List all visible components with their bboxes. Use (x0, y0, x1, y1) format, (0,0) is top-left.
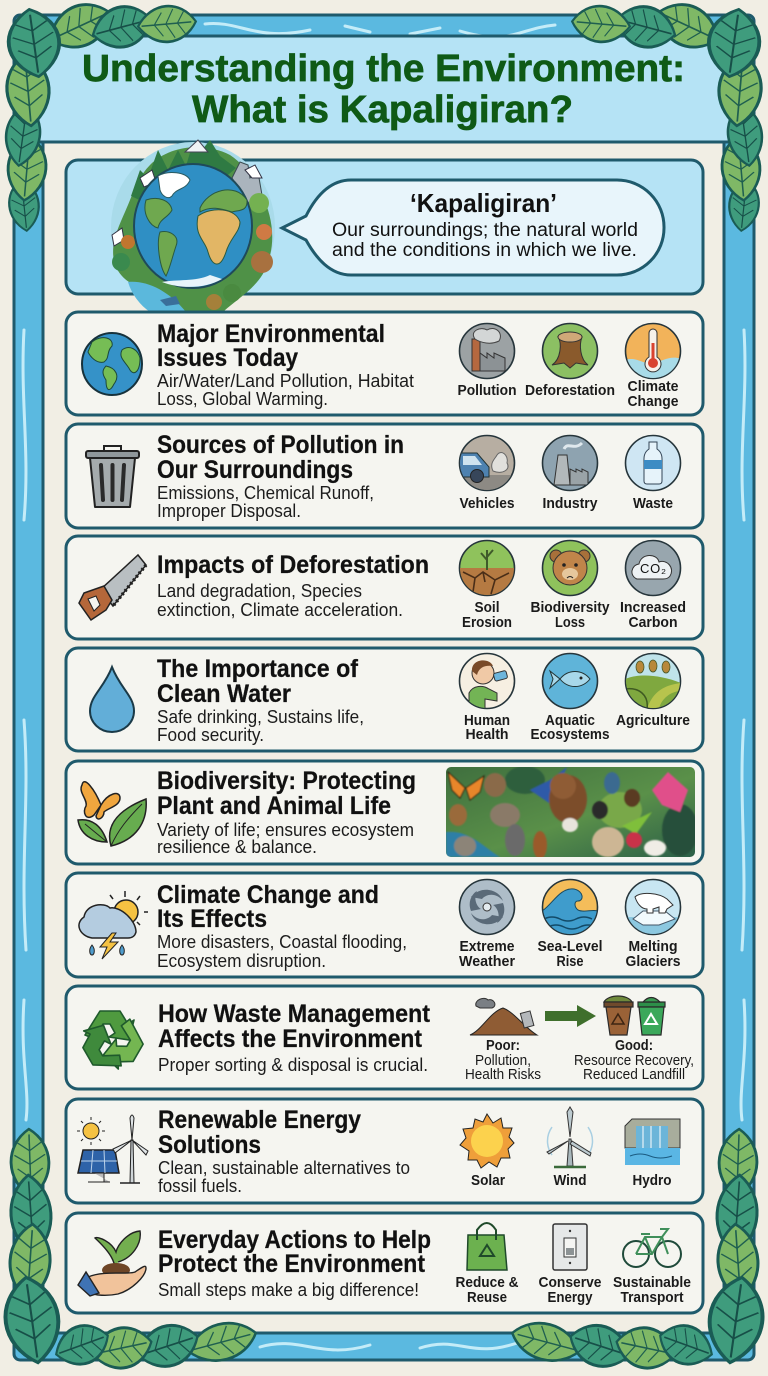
label: Biodiversity Loss: Biodiversity (530, 599, 610, 616)
description: Safe drinking, Sustains life, (157, 707, 364, 727)
icon: soil erosion (459, 540, 515, 596)
description: Air/Water/Land Pollution, Habitat (157, 371, 414, 391)
icon: hand saw (79, 555, 146, 620)
description: Clean, sustainable alternatives to (158, 1158, 410, 1178)
heading line 2: Clean Water (157, 680, 291, 708)
icon: light switch (553, 1224, 587, 1270)
leaf border: top right (571, 0, 766, 232)
label line 2: Loss (555, 614, 585, 631)
description line 2: Loss, Global Warming. (157, 389, 328, 409)
icon: recycling arrows (76, 1011, 151, 1078)
icon: hand holding seedling (78, 1231, 146, 1296)
icon: hydro dam (625, 1119, 680, 1165)
icon: vehicles (459, 436, 515, 491)
label: resource recovery: Resource Recovery, (574, 1053, 694, 1069)
heading: Climate Change and (157, 881, 379, 909)
icon: waste bottle (626, 436, 680, 490)
label line 2: Health (466, 726, 508, 743)
panel: clean water (66, 648, 703, 751)
panel: renewable energy (66, 1099, 703, 1203)
heading line 2: Its Effects (157, 905, 267, 933)
label: Wind: Wind (554, 1172, 586, 1189)
heading line 2: Issues Today (157, 344, 298, 372)
description line 2: Ecosystem disruption. (157, 951, 326, 971)
heading: Everyday Actions to Help (158, 1226, 431, 1254)
icon: increased carbon: CO₂ (640, 561, 666, 576)
panel: climate change (66, 873, 703, 977)
icon: butterfly and leaves (78, 782, 146, 846)
label line 2: Carbon (628, 614, 678, 631)
icon: globe (82, 333, 142, 395)
title panel (38, 36, 730, 142)
heading: Biodiversity: Protecting (157, 767, 416, 795)
heading: Impacts of Deforestation (157, 551, 429, 579)
label: Conserve Energy: Conserve (538, 1274, 602, 1291)
label: health risks: Health Risks (465, 1067, 541, 1083)
label: Sea-Level Rise: Sea-Level (538, 938, 602, 955)
icon: water drop (90, 667, 134, 732)
icon: bicycle (623, 1229, 681, 1267)
icon: human health (460, 654, 514, 709)
icon: sea-level rise (542, 880, 598, 935)
label: Deforestation: Deforestation (525, 382, 615, 399)
icon: agriculture (625, 654, 681, 709)
label: Extreme Weather: Extreme (460, 938, 514, 955)
icon: waste and recycling bins (604, 996, 665, 1035)
label: Poor: Poor: (486, 1037, 520, 1054)
panel: everyday actions (66, 1213, 703, 1313)
icon: storm cloud and sun (79, 891, 148, 959)
description: Variety of life; ensures ecosystem (157, 820, 414, 840)
label: Good: Good: (615, 1037, 653, 1054)
label line 2: Energy (548, 1289, 593, 1306)
heading: Renewable Energy (158, 1106, 361, 1134)
icon: reusable bag (467, 1223, 507, 1270)
speech bubble (282, 180, 664, 275)
panel: major environmental issues (66, 312, 703, 415)
panel: waste management (66, 986, 703, 1089)
label line 2: Transport (620, 1289, 684, 1306)
description line 2: Food security. (157, 725, 264, 745)
description line 2: extinction, Climate acceleration. (157, 600, 403, 620)
leaf border: bottom right (508, 1128, 768, 1375)
heading: The Importance of (157, 655, 359, 683)
icon: extreme weather (460, 880, 514, 934)
label: Agriculture: Agriculture (616, 712, 690, 729)
label: Vehicles: Vehicles (460, 495, 514, 512)
label: Reduce and Reuse: Reduce & (456, 1274, 519, 1291)
heading line 2: Protect the Environment (158, 1250, 426, 1278)
description: Proper sorting & disposal is crucial. (158, 1055, 428, 1075)
label: Waste: Waste (633, 495, 673, 512)
description line 2: Improper Disposal. (157, 501, 301, 521)
panel: biodiversity (66, 761, 703, 864)
label line 2: Erosion (462, 614, 512, 631)
image: collage of plants and animals (446, 766, 698, 859)
label line 2: Rise (556, 953, 584, 970)
heading line 2: Solutions (158, 1131, 261, 1159)
title line 1: Understanding the Environment: (82, 48, 685, 90)
label: Pollution: Pollution (458, 382, 516, 399)
label: Melting Glaciers: Melting (628, 938, 678, 955)
icon: wind (547, 1107, 593, 1167)
icon: solar (460, 1114, 514, 1168)
icon: aquatic ecosystems (542, 654, 598, 708)
description line 2: fossil fuels. (158, 1176, 242, 1196)
heading: Sources of Pollution in (157, 431, 404, 459)
heading: Major Environmental (157, 320, 385, 348)
icon: industry (542, 436, 598, 490)
icon: trash can (86, 446, 139, 507)
icon: climate change (625, 324, 681, 379)
label: Solar: Solar (471, 1172, 505, 1189)
label line 2: Change (628, 393, 678, 410)
icon: deforestation (542, 324, 598, 378)
icon: biodiversity loss bear (542, 540, 598, 596)
label: Human Health: Human (464, 712, 510, 729)
panel: impacts of deforestation (66, 536, 703, 639)
description: Small steps make a big difference! (158, 1280, 419, 1300)
description: More disasters, Coastal flooding, (157, 932, 407, 952)
description line 2: resilience & balance. (157, 837, 317, 857)
icon: melting glaciers (625, 880, 681, 935)
leaf border: top left (2, 0, 197, 232)
heading line 2: Plant and Animal Life (157, 792, 391, 820)
label: Aquatic Ecosystems: Aquatic (545, 712, 595, 729)
label: pollution risk: Pollution, (475, 1053, 531, 1069)
heading line 2: Our Surroundings (157, 456, 353, 484)
heading line 2: Affects the Environment (158, 1025, 423, 1053)
description: Emissions, Chemical Runoff, (157, 483, 374, 503)
label: Industry: Industry (542, 495, 598, 512)
icon: solar panel and wind turbine (77, 1115, 148, 1183)
label line 2: Weather (459, 953, 515, 970)
label: Sustainable Transport: Sustainable (613, 1274, 691, 1291)
leaf border: bottom left (0, 1128, 260, 1375)
label line 2: Glaciers (626, 953, 680, 970)
label line 2: Ecosystems (530, 726, 610, 743)
icon: increased carbon (626, 540, 680, 596)
label: Hydro: Hydro (632, 1172, 672, 1189)
title line 2: What is Kapaligiran? (192, 89, 573, 131)
bubble text: Our surroundings; the natural world (332, 220, 638, 241)
icon: illustrated earth with nature and cities (111, 140, 275, 312)
arrow: poor to good (545, 1005, 596, 1027)
description: Land degradation, Species (157, 581, 362, 601)
panel: sources of pollution (66, 424, 703, 528)
label: Increased Carbon: Increased (620, 599, 686, 616)
label: reduced landfill: Reduced Landfill (583, 1067, 685, 1083)
label: Soil Erosion: Soil (474, 599, 500, 616)
label line 2: Reuse (467, 1289, 507, 1306)
bubble text line 2: and the conditions in which we live. (332, 240, 637, 261)
icon: pollution (460, 324, 514, 378)
panel: definition of Kapaligiran (66, 140, 703, 312)
label: Climate Change: Climate (628, 378, 678, 395)
heading: How Waste Management (158, 1000, 431, 1028)
bubble heading: ‘Kapaligiran’ (410, 188, 557, 218)
icon: polluted waste pile (470, 998, 537, 1035)
